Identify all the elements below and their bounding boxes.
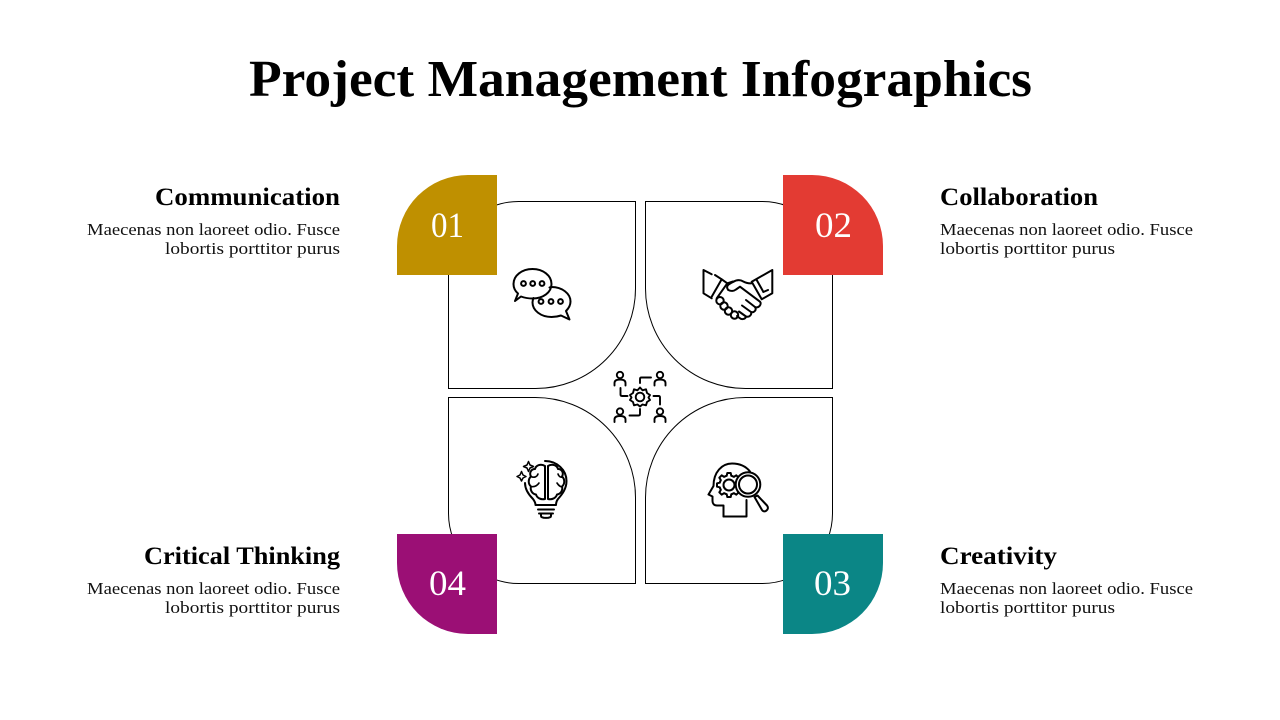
- panel: tile top right: [646, 202, 832, 388]
- text block: collaboration: Collaboration: [940, 184, 1098, 211]
- badge 03: 03: [814, 563, 851, 603]
- text block: critical thinking: [87, 543, 341, 617]
- icon: chat bubbles: [514, 269, 570, 320]
- icon: handshake: [704, 270, 772, 319]
- badge 03: [783, 534, 883, 634]
- badge 02: 02: [815, 205, 852, 245]
- badge 04: 04: [429, 563, 466, 603]
- badge 02: [783, 175, 883, 275]
- text block: critical thinking: Critical Thinking: [144, 543, 341, 570]
- text block: collaboration: lobortis porttitor purus: [940, 239, 1115, 258]
- text block: creativity: Maecenas non laoreet odio. Fusce: [940, 579, 1193, 598]
- text block: communication: Communication: [155, 184, 340, 211]
- icon: brain light bulb: [517, 461, 566, 518]
- text block: creativity: Creativity: [940, 543, 1058, 570]
- text block: communication: lobortis porttitor purus: [165, 239, 340, 258]
- text block: critical thinking: lobortis porttitor purus: [165, 598, 340, 617]
- text block: creativity: lobortis porttitor purus: [940, 598, 1115, 617]
- badge 01: 01: [431, 205, 464, 245]
- text block: creativity: [940, 543, 1193, 617]
- panel: tile bottom left: [448, 398, 636, 584]
- title: Project Management Infographics: [249, 51, 1032, 108]
- badge 04: [397, 534, 497, 634]
- icon: head with gear and magnifier: [708, 464, 768, 516]
- text block: collaboration: Maecenas non laoreet odio. Fusce: [940, 220, 1193, 239]
- text block: communication: [87, 184, 340, 258]
- badge 01: [397, 175, 497, 275]
- panel: tile top left: [448, 202, 636, 388]
- text block: communication: Maecenas non laoreet odio. Fusce: [87, 220, 340, 239]
- icon: team and gear: [614, 372, 666, 422]
- panel: tile bottom right: [646, 398, 832, 584]
- text block: collaboration: [940, 184, 1193, 258]
- text block: critical thinking: Maecenas non laoreet odio. Fusce: [87, 579, 340, 598]
